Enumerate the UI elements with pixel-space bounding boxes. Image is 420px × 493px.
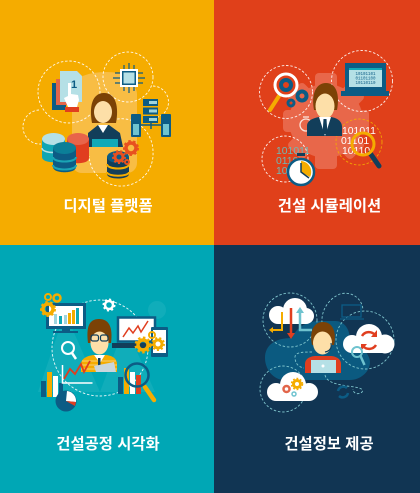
icon: gears	[113, 141, 138, 164]
dashed circles	[23, 52, 169, 186]
icon: laptop with line chart	[112, 318, 155, 348]
panel: construction information	[214, 245, 420, 493]
icon: microchip	[113, 63, 145, 93]
chart: magnified bars	[118, 364, 154, 400]
background blob	[265, 321, 370, 380]
dashed circle	[52, 300, 148, 396]
icon: tablet	[151, 327, 168, 357]
icon: stopwatch	[288, 153, 314, 185]
icon: documents with hand	[52, 71, 82, 112]
binary text: white: 01101	[341, 136, 369, 147]
binary text: teal: 10	[276, 166, 288, 177]
icon: laptop: 10101101	[355, 73, 376, 77]
icon: support agent	[305, 322, 341, 373]
heading: 건설정보 제공	[284, 435, 374, 453]
binary text: teal: 101011	[276, 146, 310, 157]
dashed circles	[260, 50, 392, 182]
icon: white magnifier	[62, 342, 76, 359]
heading: 건설 시뮬레이션	[278, 197, 381, 215]
chart: left bars	[41, 372, 63, 397]
icon: documents with hand: 1	[71, 79, 77, 91]
binary text: white: 101011	[342, 126, 376, 137]
icon: monitor with bars	[48, 304, 84, 333]
binary text: teal: 0110	[276, 156, 299, 167]
icon: cloud with gears	[267, 372, 318, 401]
heading: 디지털 플랫폼	[63, 197, 153, 215]
icon: magnifier with gear	[270, 74, 306, 110]
dashed outlines	[260, 293, 394, 412]
icon: white gear	[104, 300, 114, 310]
chart: line chart	[62, 361, 92, 383]
icon: outline laptop	[340, 305, 364, 319]
icon: gears top-left	[41, 294, 60, 316]
icon: cloud with sync	[343, 324, 394, 365]
icon: stopwatch outline	[300, 117, 312, 131]
icon: yellow magnifier	[352, 133, 379, 166]
icon: servers	[131, 99, 171, 137]
binary text: white	[341, 126, 376, 157]
icon: laptop: 01101100	[355, 78, 376, 82]
panel: construction process visualization	[0, 245, 214, 493]
panel: construction simulation	[214, 0, 420, 245]
chart: pie	[56, 390, 76, 412]
background shapes	[38, 301, 166, 392]
heading: 건설공정 시각화	[56, 435, 160, 453]
icon: laptop	[341, 63, 389, 96]
icon: businessman	[307, 83, 342, 136]
icon: woman	[88, 93, 123, 147]
icon: man with glasses	[81, 319, 117, 372]
background gear	[283, 73, 369, 169]
icon: cloud with arrows	[269, 298, 314, 339]
icon: yellow gears	[136, 332, 164, 352]
panel: digital platform	[0, 0, 214, 245]
binary text: white: 10110	[342, 146, 370, 157]
icon: laptop: 10110110	[355, 82, 376, 86]
icon: databases	[42, 133, 129, 178]
binary text: teal	[276, 146, 310, 177]
background faded database shape	[72, 72, 137, 173]
icon: faded sync arrows	[338, 387, 348, 397]
